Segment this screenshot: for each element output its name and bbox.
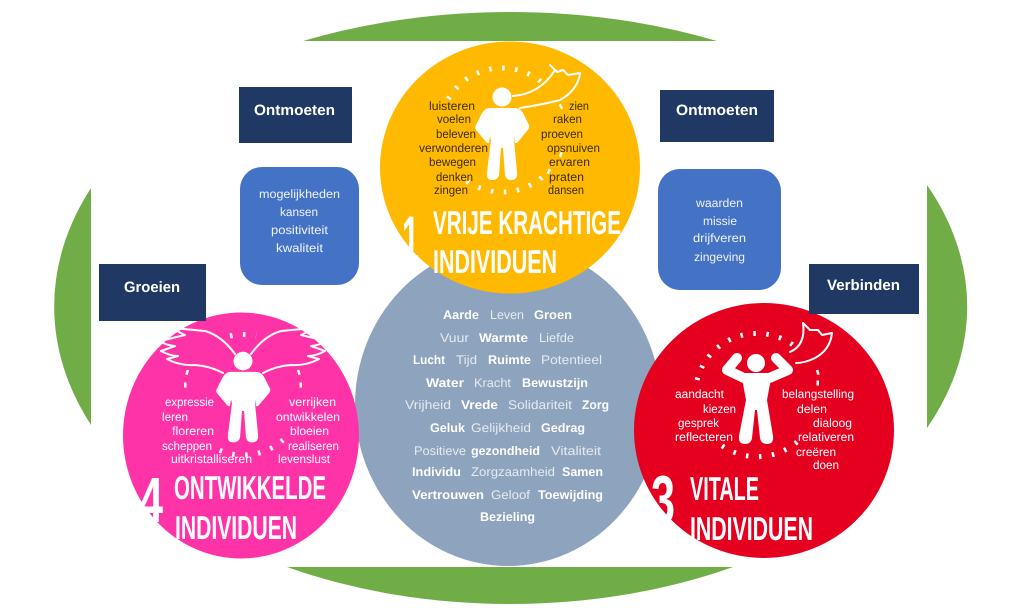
right word list: bloeien [290,424,329,438]
label: verbinden [809,264,919,314]
panel: blue box left: mogelijkheden [259,187,340,201]
left word list: kiezen [703,402,736,416]
left word list: uitkristalliseren [171,452,252,466]
central word cloud: Water [426,376,464,390]
panel: blue box left [240,167,359,285]
panel: blue box right [658,169,781,290]
central word cloud: Kracht [474,376,512,390]
central word cloud: Bezieling [480,510,535,524]
central word cloud [405,308,609,524]
icon: wings [160,328,326,373]
left word list [675,387,736,444]
central word cloud: Groen [534,308,572,322]
panel: central values circle [355,244,661,566]
central word cloud: Vertrouwen [412,488,484,502]
heading: ontwikkelde individuen: ONTWIKKELDE [174,469,326,506]
icon: flexing figure [727,354,788,444]
heading: vitale individuen: VITALE [690,470,759,507]
heading: vitale individuen: INDIVIDUEN [690,510,813,547]
left word list: beleven [436,127,476,141]
right word list: relativeren [798,430,854,444]
right word list [782,387,854,472]
right word list: doen [813,458,839,472]
central word cloud: Geloof [491,488,531,502]
right word list [541,99,600,197]
heading: vrije krachtige individuen: INDIVIDUEN [433,243,557,280]
right word list: opsnuiven [547,141,600,155]
heading: ontwikkelde individuen [139,464,326,546]
right word list: raken [553,112,582,126]
icon: cape [513,65,580,108]
panel: blue box right: zingeving [694,250,745,264]
label: verbinden: Verbinden [827,277,900,294]
central word cloud: Ruimte [488,353,531,367]
panel: blue box right: drijfveren [693,231,746,245]
label: ontmoeten left: Ontmoeten [254,102,335,119]
heading: vitale individuen [651,462,813,547]
left word list: leren [162,410,188,424]
right word list: zien [569,99,589,113]
right word list: verrijken [289,395,336,409]
left word list: bewegen [429,155,476,169]
left word list [419,99,488,197]
right word list: realiseren [288,439,339,453]
left word list: luisteren [429,99,475,113]
central word cloud: Leven [490,308,524,322]
label: groeien [99,264,206,321]
right word list: dialoog [813,416,852,430]
right word list: belangstelling [782,387,854,401]
right word list: ontwikkelen [276,410,340,424]
right word list: dansen [548,183,584,197]
heading: vitale individuen: 3 [651,462,675,538]
left word list: zingen [434,183,468,197]
central word cloud: Lucht [413,353,446,367]
central word cloud: Liefde [539,331,574,345]
right word list: levenslust [278,452,331,466]
central word cloud: Geluk [430,421,465,435]
icon: figure [216,352,270,442]
central word cloud: Samen [562,465,603,479]
central word cloud: Vitaliteit [551,444,602,458]
label: ontmoeten right [660,90,774,142]
icon: radiating ticks [184,335,302,455]
central word cloud: Vuur [440,331,469,345]
right word list: creëren [796,445,836,459]
panel: blue box right: waarden [695,196,743,210]
left word list: scheppen [162,439,212,453]
left word list: reflecteren [675,430,733,444]
panel: blue box left: kansen [280,205,318,219]
right word list: delen [797,402,827,416]
central word cloud: Tijd [456,353,477,367]
icon: hero figure [475,88,529,180]
icon: radiating ticks [448,68,562,192]
central word cloud: Zorg [582,398,609,412]
central word cloud: Vrijheid [405,398,451,412]
central word cloud: Positieve [414,444,466,458]
panel: 3 vitale individuen [634,303,894,558]
central word cloud: Solidariteit [508,398,573,412]
central word cloud: Gelijkheid [471,421,531,435]
label: groeien: Groeien [124,279,180,296]
panel: 1 vrije krachtige individuen [380,42,640,294]
central word cloud: Potentieel [541,353,602,367]
right word list: proeven [541,127,583,141]
central word cloud: Aarde [443,308,479,322]
heading: vrije krachtige individuen [402,202,621,280]
label: ontmoeten left [239,87,352,143]
heading: vrije krachtige individuen: 1 [402,202,419,276]
icon: cape [790,323,832,363]
central word cloud: gezondheid [471,444,540,458]
heading: ontwikkelde individuen: 4 [139,464,163,536]
right word list [276,395,340,466]
heading: vrije krachtige individuen: VRIJE KRACHTIGE [433,204,621,241]
central word cloud: Gedrag [541,421,585,435]
left word list: verwonderen [419,141,488,155]
central word cloud: Zorgzaamheid [471,465,555,479]
icon: radiating ticks [697,333,819,457]
left word list: voelen [437,112,471,126]
right word list: ervaren [549,155,590,169]
left word list: aandacht [675,387,725,401]
left word list: gesprek [678,416,720,430]
heading: ontwikkelde individuen: INDIVIDUEN [175,509,297,546]
central word cloud: Individu [412,465,461,479]
central word cloud: Warmte [479,331,528,345]
label: ontmoeten right: Ontmoeten [676,102,758,119]
panel: 4 ontwikkelde individuen [123,312,359,558]
panel: blue box left: positiviteit [271,223,329,237]
panel: blue box right: missie [703,214,737,228]
central word cloud: Vrede [461,398,498,412]
left word list [162,395,252,466]
left word list: expressie [165,395,214,409]
central word cloud: Toewijding [538,488,603,502]
panel: blue box left: kwaliteit [276,241,324,255]
right word list: praten [549,170,584,184]
central word cloud: Bewustzijn [522,376,588,390]
left word list: denken [436,170,473,184]
left word list: floreren [172,424,214,438]
